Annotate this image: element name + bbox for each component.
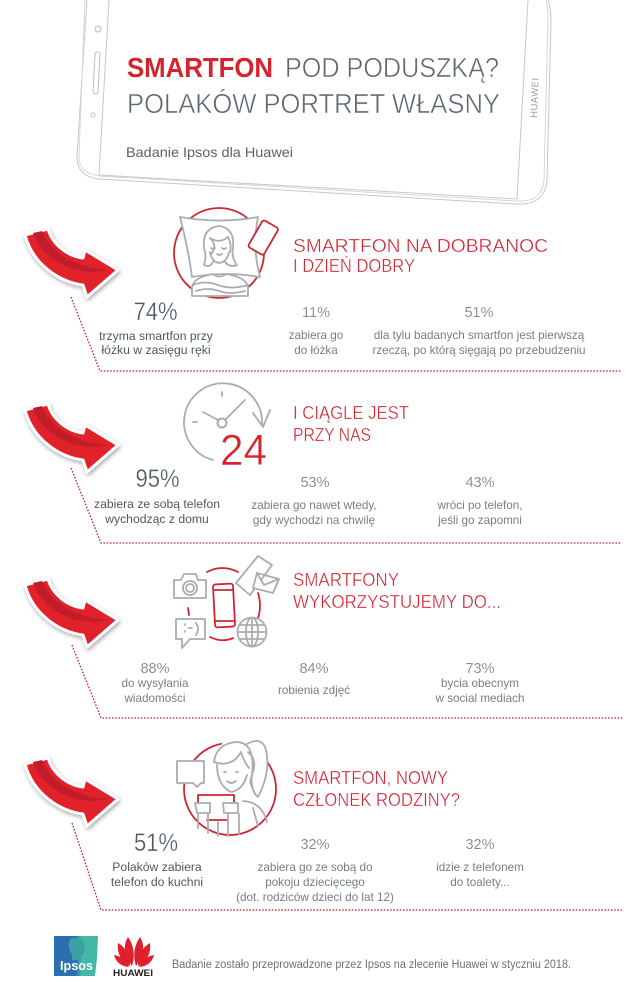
arrow 2 [25,404,118,472]
stat 88%: wiadomości [123,692,186,705]
heading 4: SMARTFON, NOWY [293,767,448,788]
heading 2 [293,402,409,445]
stat 74%: 74% [134,298,178,326]
icon: girl with tablet [177,741,276,836]
stat 73%: bycia obecnym [441,677,519,690]
stat 95%: wychodząc z domu [104,512,209,526]
stat 73% [434,660,524,705]
heading 2: PRZY NAS [293,424,371,445]
icon: sleeping woman on pillow [174,208,279,298]
subtitle: Badanie Ipsos dla Huawei [126,144,293,160]
stat 11% [289,304,344,357]
stat 95% [94,465,220,526]
stat 88%: do wysyłania [122,677,189,690]
stat 51% kitchen: telefon do kuchni [111,875,203,889]
stat 51%: rzeczą, po którą sięgają po przebudzeniu [372,344,586,357]
heading 3: WYKORZYSTUJEMY DO... [293,591,501,612]
stat 53%: gdy wychodzi na chwilę [253,514,375,527]
stat 43%: wróci po telefon, [436,499,523,512]
stat 88%: 88% [140,660,170,677]
arrow 1 [25,229,118,297]
stat 51% [372,304,586,357]
stat 11%: 11% [302,304,330,321]
stat 32% children [236,836,394,904]
stat 32% toilet: idzie z telefonem [436,861,524,874]
title: POLAKÓW PORTRET WŁASNY [127,88,500,119]
stat 53%: 53% [300,474,330,491]
stat 43%: 43% [466,474,494,491]
stat 73%: 73% [466,660,494,677]
stat 95%: 95% [136,465,180,493]
logo: Ipsos: Ipsos [60,958,93,973]
heading 2: I CIĄGLE JEST [293,402,409,423]
stat 32% toilet [436,836,524,889]
stat 32% toilet: 32% [466,836,494,853]
stat 84%: 84% [300,660,328,677]
icon: smartphone uses [174,556,279,648]
stat 32% children: 32% [300,836,330,853]
stat 32% children: zabiera go ze sobą do [257,861,373,874]
logo: Huawei [113,937,154,979]
arrow 4 [25,758,118,826]
stat 51% kitchen: 51% [134,829,178,857]
stat 32% children: (dot. rodziców dzieci do lat 12) [236,891,394,904]
stat 73%: w social mediach [434,692,524,705]
section 4 connector [72,823,622,910]
heading 1: SMARTFON NA DOBRANOC [293,235,548,256]
stat 32% toilet: do toalety... [450,876,510,889]
phone outline header [77,0,551,204]
footer note: Badanie zostało przeprowadzone przez Ipsos na zlecenie Huawei w styczniu 2018. [172,959,571,971]
title: SMARTFON [127,52,273,83]
section 2 connector [71,468,622,543]
stat 74%: łóżku w zasięgu ręki [101,343,211,357]
stat 84%: robienia zdjęć [278,684,350,697]
heading 1 [293,235,548,276]
stat 11%: do łóżka [294,344,338,357]
logo: Huawei: HUAWEI [113,968,153,979]
stat 11%: zabiera go [289,329,344,342]
title [127,52,500,119]
stat 53% [251,474,377,527]
logo: Ipsos [54,936,98,976]
stat 51% kitchen [111,829,203,889]
stat 74% [99,298,214,357]
icon: clock 24 [184,383,270,475]
stat 95%: zabiera ze sobą telefon [94,497,220,511]
phone outline header: HUAWEI [529,78,541,118]
title: POD PODUSZKĄ? [285,52,499,83]
stat 53%: zabiera go nawet wtedy, [251,499,377,512]
heading 3 [293,569,501,612]
stat 88% [122,660,189,705]
section 3 connector [72,645,622,718]
stat 84% [278,660,350,697]
stat 51%: 51% [464,304,494,321]
arrow 3 [25,579,118,647]
heading 4: CZŁONEK RODZINY? [293,789,460,810]
stat 32% children: pokoju dziecięcego [265,876,365,889]
stat 51%: dla tylu badanych smartfon jest pierwszą [374,329,585,342]
heading 4 [293,767,460,810]
stat 51% kitchen: Polaków zabiera [112,860,202,874]
stat 43% [436,474,523,527]
stat 74%: trzyma smartfon przy [99,329,214,343]
heading 3: SMARTFONY [293,569,399,590]
heading 1: I DZIEŃ DOBRY [293,255,415,276]
icon: clock 24: 24 [220,426,267,475]
section 1 connector [71,297,622,371]
stat 43%: jeśli go zapomni [437,514,522,527]
